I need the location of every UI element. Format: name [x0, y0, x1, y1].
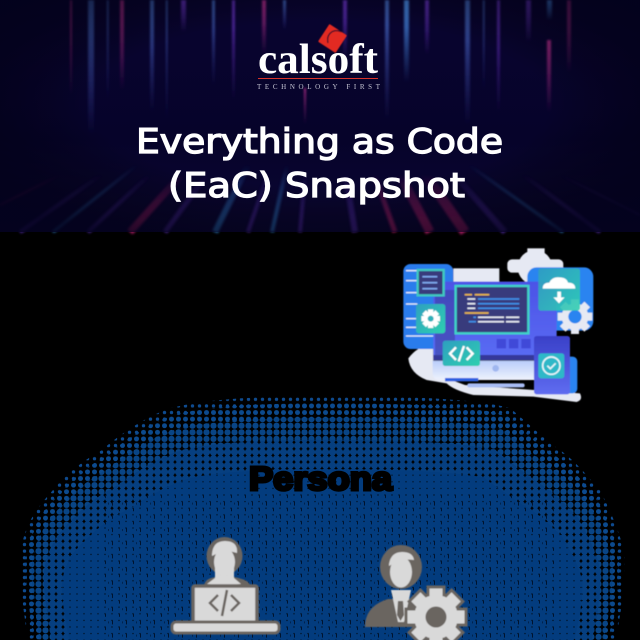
developer head	[204, 537, 250, 586]
title	[136, 122, 503, 205]
code symbol	[210, 590, 239, 616]
phone	[534, 336, 570, 394]
engineer head	[380, 545, 422, 589]
logo wordmark: calsoft	[258, 37, 378, 83]
icon: developer with laptop	[172, 537, 279, 633]
laptop	[193, 586, 257, 623]
laptop base	[172, 622, 279, 633]
icon: settings gear tile	[416, 304, 445, 333]
heading: Persona: Persona	[249, 460, 393, 497]
left panel stripes	[406, 271, 433, 336]
logo tagline: TECHNOLOGY FIRST	[257, 83, 381, 91]
monitor body	[433, 282, 557, 360]
white gear and base blobs	[408, 248, 581, 402]
icon: cloud download tile	[538, 268, 580, 311]
panel: header banner	[0, 0, 640, 232]
perspective floor lines	[0, 165, 640, 232]
monitor stand	[433, 361, 534, 380]
title: Everything as Code	[136, 122, 503, 161]
small text window	[418, 270, 444, 295]
icon: red logo mark	[318, 24, 347, 53]
icon: engineer with gear	[365, 545, 466, 640]
blue side panels	[403, 264, 453, 349]
illustration: developer monitor with code and cloud	[403, 248, 593, 402]
vertical light streaks	[70, 0, 571, 135]
logo: calsoft	[257, 24, 381, 91]
icon: code tag tile	[443, 341, 480, 366]
halftone blue backdrop	[0, 390, 640, 640]
title: (EaC) Snapshot	[168, 166, 465, 205]
icon: white gear behind monitor	[558, 299, 592, 334]
shoulders and tie	[365, 590, 434, 627]
screen small tiles	[497, 339, 531, 348]
code window	[456, 286, 528, 333]
gear	[406, 587, 466, 640]
